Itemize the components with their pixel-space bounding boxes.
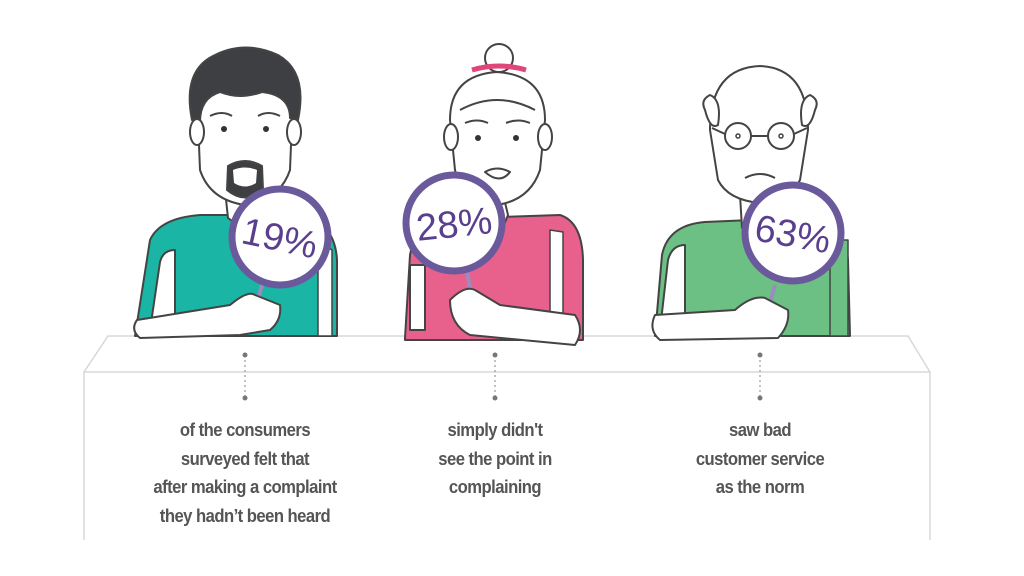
connector dots (242, 352, 762, 400)
sign: 63%: 63% (752, 208, 834, 262)
caption 1: surveyed felt that (181, 448, 309, 468)
caption 2 (438, 419, 552, 497)
caption 3: as the norm (716, 476, 804, 497)
caption 2: see the point in (438, 448, 552, 468)
caption 2: simply didn't (447, 419, 543, 440)
sign: 28%: 28% (414, 200, 494, 250)
sign: 28% (406, 175, 502, 271)
sign: 63% (745, 185, 841, 281)
caption 2: complaining (449, 476, 541, 497)
caption 3: customer service (696, 448, 824, 468)
sign: 19%: 19% (238, 211, 321, 267)
caption 1 (153, 419, 337, 526)
caption 1: they hadn’t been heard (160, 504, 330, 526)
sign: 19% (232, 189, 328, 285)
caption 3 (696, 419, 824, 497)
caption 1: after making a complaint (153, 476, 337, 497)
table (84, 336, 930, 540)
caption 1: of the consumers (180, 419, 310, 440)
character: man with goatee (134, 48, 337, 338)
character: old bald man with glasses (652, 66, 850, 340)
caption 3: saw bad (729, 419, 791, 440)
character: woman with bun (405, 44, 583, 345)
